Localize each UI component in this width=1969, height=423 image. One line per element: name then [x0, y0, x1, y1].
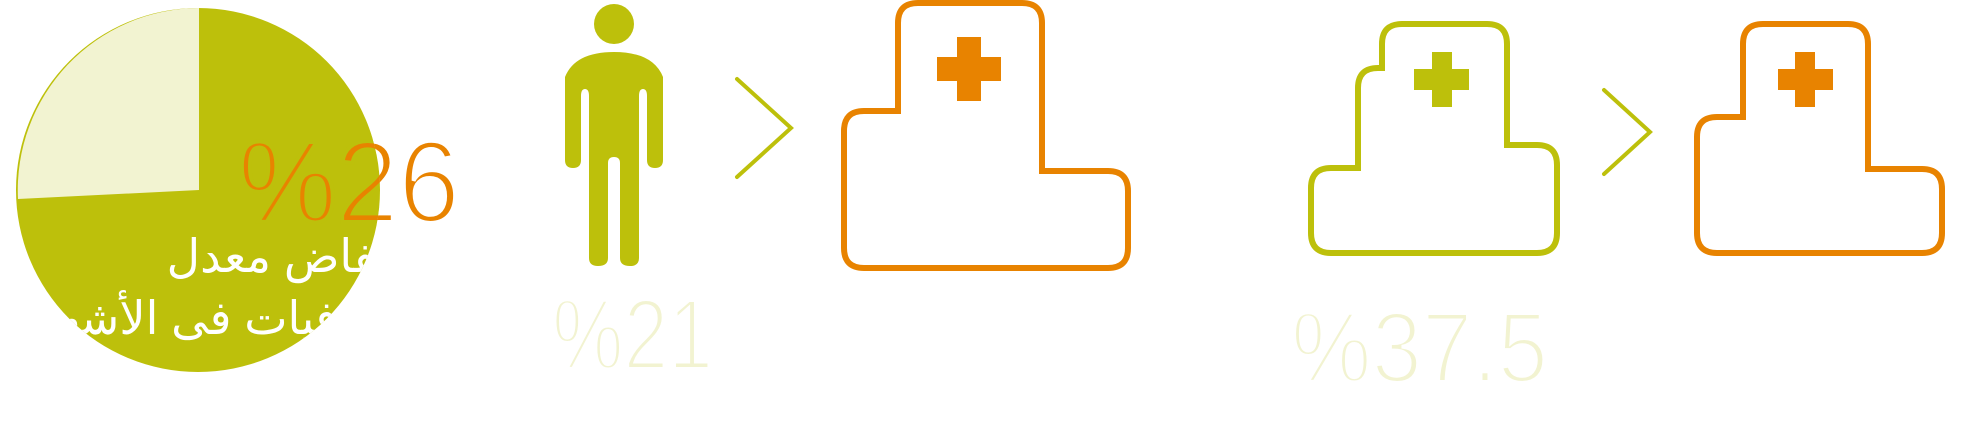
arrow: chevron 2 [1604, 90, 1650, 174]
stat: %26: %26 [238, 117, 460, 247]
cross [1778, 52, 1833, 107]
cross [1414, 52, 1469, 107]
caption: Arabic text (clipped to circle) [70, 237, 368, 340]
arrow: chevron 1 [737, 79, 791, 177]
icon: hospital 1 (orange) [844, 3, 1128, 268]
stat: %37.5: %37.5 [1291, 292, 1548, 404]
caption: Arabic text (clipped to circle): الوفيات فى الأشهر [32, 289, 388, 346]
icon: hospital 3 (orange) [1697, 24, 1942, 253]
stat: %21: %21 [552, 279, 713, 391]
stat: %26 [244, 140, 454, 224]
pie chart: 26% reduction [16, 8, 460, 372]
icon: hospital 2 (olive) [1311, 24, 1557, 253]
caption: Arabic text (clipped to circle): انخفاض معدل [167, 230, 432, 284]
stat: %26: %26 [238, 117, 460, 247]
cross [937, 37, 1001, 101]
icon: person [565, 4, 663, 266]
pie wedge: light segment [18, 8, 199, 199]
